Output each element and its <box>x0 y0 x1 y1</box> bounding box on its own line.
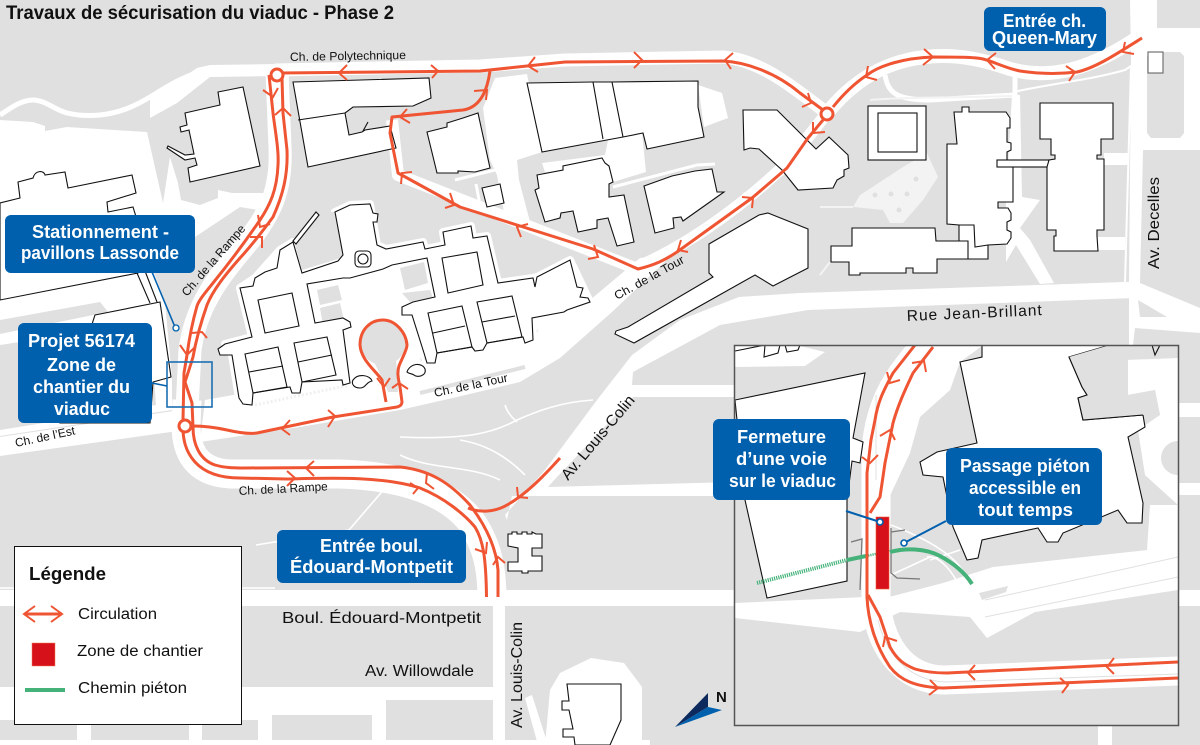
callout: Projet 56174 <box>18 323 152 423</box>
building: square atrium <box>868 106 926 160</box>
callout: Projet 56174: viaduc <box>54 399 110 419</box>
inset stairs and ramp outlines <box>851 525 968 590</box>
inset work zone <box>876 517 889 589</box>
legend item: chemin piéton: Chemin piéton <box>78 680 187 697</box>
building: north-east <box>743 110 849 190</box>
inset routes <box>862 345 1178 695</box>
zone rectangle on main map <box>167 362 212 407</box>
callout: Stationnement <box>5 215 195 273</box>
building: centre block <box>535 158 634 246</box>
roundabouts <box>179 69 833 432</box>
callout: Entrée boul. Édouard-Montpetit: Entrée boul. <box>320 536 423 556</box>
building: main pavilion complex <box>218 204 590 405</box>
street labels: Ch. de la Tour <box>433 371 509 400</box>
callout: Passage piéton: accessible en <box>969 478 1081 498</box>
route: Ch. de Polytechnique <box>280 61 823 110</box>
callout: Entrée boul. Édouard-Montpetit: Édouard-Montpetit <box>290 556 453 577</box>
building: north wing <box>527 81 704 152</box>
inset leader lines <box>846 511 946 546</box>
legend title: Légende <box>29 564 106 584</box>
callout: Passage piéton: Passage piéton <box>960 456 1090 476</box>
callout: Stationnement: Stationnement - <box>32 222 169 242</box>
north arrow: N <box>716 689 727 706</box>
legend item: circulation <box>24 606 157 623</box>
inset building stubs <box>735 345 1160 357</box>
route: Ch. de la Rampe west lanes <box>183 75 486 597</box>
Ch. de la Rampe band <box>187 72 280 410</box>
legend item: chemin piéton <box>25 680 187 697</box>
leader: Projet <box>152 383 167 386</box>
street labels: Av. Louis-Colin <box>558 392 639 484</box>
building: Lassonde north <box>0 172 150 300</box>
callout: Entrée boul. Édouard-Montpetit <box>277 530 466 583</box>
building: wedge block <box>644 169 724 233</box>
building: small square <box>482 184 504 207</box>
building: far east <box>1040 103 1113 251</box>
circulation routes, main map <box>179 38 1142 597</box>
legend item: zone de chantier <box>32 643 203 666</box>
callout: Entrée ch. Queen-Mary: Queen-Mary <box>992 28 1097 48</box>
legend item: zone de chantier: Zone de chantier <box>77 643 203 660</box>
street labels: Ch. de la Rampe <box>179 222 249 299</box>
callout: Fermeture d'une voie: sur le viaduc <box>729 471 836 491</box>
Rue Jean-Brillant and Av. Louis-Colin <box>505 282 1135 520</box>
building: long wedge <box>615 213 808 343</box>
leader: Stationnement <box>152 272 179 331</box>
white halo around the main pavilion complex <box>225 204 590 398</box>
inset frame <box>734 346 1178 726</box>
building: footbridge <box>997 160 1049 167</box>
inset roads <box>735 346 825 367</box>
building: block 3 <box>427 113 490 173</box>
callout: Projet 56174: chantier du <box>33 377 130 397</box>
callout: Projet 56174: Zone de <box>47 355 116 375</box>
central court and loop interior <box>295 212 433 392</box>
callout: Entrée ch. Queen-Mary: Entrée ch. <box>1003 11 1086 31</box>
inset building: pavilion <box>920 345 1145 560</box>
route: Ch. de la Tour and loop <box>193 320 407 433</box>
Ch. de l'Est <box>0 410 185 456</box>
inset pedestrian path <box>757 549 972 584</box>
inset arrows <box>862 361 1114 695</box>
building: Polytechnique <box>293 78 431 167</box>
building: large east complex <box>831 107 1013 275</box>
street labels: Ch. de Polytechnique <box>290 48 406 64</box>
street labels: Ch. de la Rampe <box>238 479 328 498</box>
callout: Fermeture d'une voie: Fermeture <box>737 427 826 447</box>
street labels: Ch. de l’Est <box>14 423 77 450</box>
title: Travaux de sécurisation du viaduc - Phase 2 <box>6 2 394 24</box>
street labels: Ch. de la Tour <box>612 253 687 303</box>
Av. Decelles and blocks <box>1129 0 1200 345</box>
right side stripes <box>1170 403 1200 417</box>
callout: Entrée ch. Queen-Mary <box>984 7 1106 51</box>
courtyards <box>245 252 522 393</box>
route: connector to Av. Louis-Colin <box>468 458 560 511</box>
Ch. de la Tour band <box>200 255 672 442</box>
street labels: Av. Willowdale <box>365 663 474 680</box>
callout: Passage piéton <box>946 448 1102 525</box>
rotunda <box>355 251 371 267</box>
callout: Passage piéton: tout temps <box>978 500 1073 520</box>
north arrow <box>675 689 727 727</box>
legend <box>14 546 242 724</box>
direction arrows <box>180 42 1134 565</box>
building: south block <box>562 684 621 745</box>
legend item: circulation: Circulation <box>78 606 157 623</box>
building: small rectangle <box>1148 52 1163 73</box>
route: Queen-Mary <box>833 38 1142 107</box>
building: west block <box>167 87 260 182</box>
inset map: viaduct detail <box>735 345 1195 725</box>
callout: Projet 56174: Projet 56174 <box>28 331 135 351</box>
inset building: west <box>735 373 865 598</box>
inset buildings <box>735 345 1160 598</box>
street labels: Rue Jean-Brillant <box>906 302 1043 325</box>
thin footpaths <box>0 400 593 588</box>
callout: Fermeture d'une voie <box>713 419 850 500</box>
tube corridor <box>293 212 319 244</box>
building: cross-shaped <box>508 532 542 573</box>
street labels: Av. Decelles <box>1146 177 1163 269</box>
route: branch to Polytechnique <box>390 71 823 269</box>
callout: Fermeture d'une voie: d’une voie <box>736 449 827 469</box>
small ponds <box>352 364 425 388</box>
street labels: Av. Louis-Colin <box>509 622 526 728</box>
building: Lassonde south <box>60 302 171 423</box>
street labels: Boul. Édouard-Montpetit <box>282 610 482 627</box>
callout: Stationnement: pavillons Lassonde <box>21 243 179 263</box>
Boul. Édouard-Montpetit <box>0 590 1200 606</box>
